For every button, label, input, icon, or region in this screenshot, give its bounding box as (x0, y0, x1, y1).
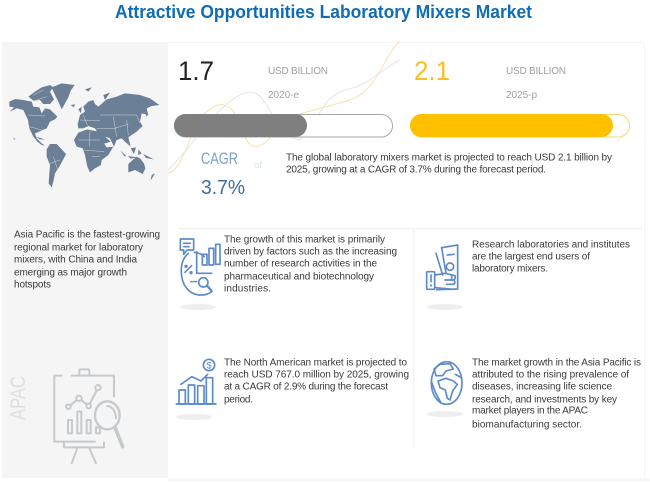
left panel text: mixers, with China and India (14, 254, 137, 266)
growth drivers text: number of research activities in the (224, 258, 377, 270)
panel: Asia Pacific drivers (427, 358, 641, 430)
Asia Pacific drivers text: research, and investments by key (472, 394, 617, 406)
North America text: reach USD 767.0 million by 2025, growing (224, 370, 409, 380)
decorative trend curves (168, 42, 400, 173)
stat: 2020 value: USD BILLION (268, 66, 328, 77)
growth drivers text: pharmaceutical and biotechnology (224, 272, 374, 282)
CAGR callout: 3.7% (201, 177, 245, 199)
APAC vertical label: APAC (7, 376, 30, 420)
North America text: at a CAGR of 2.9% during the forecast (224, 382, 388, 392)
CAGR callout: CAGR (201, 150, 238, 168)
icon shadow (176, 414, 212, 420)
icon: presentation board with magnifier (54, 369, 123, 463)
end users text: laboratory mixers. (472, 264, 548, 274)
end users text: Research laboratories and institutes (472, 240, 630, 250)
stat: 2025 value (414, 56, 566, 101)
North America text: The North American market is projected to (224, 358, 407, 368)
Asia Pacific drivers text (472, 358, 641, 430)
left panel text: regional market for laboratory (14, 242, 143, 254)
icon: hand holding cash (427, 245, 458, 290)
bar: 2020 (174, 114, 392, 137)
stat: 2025 value: USD BILLION (506, 66, 566, 77)
stat: 2020 value: 2020-e (268, 90, 299, 101)
panel: growth drivers (180, 234, 397, 310)
panel: left regional sidebar (2, 42, 168, 478)
left panel text: emerging as major growth (14, 268, 127, 278)
stat: 2025 value: 2025-p (506, 90, 537, 101)
Asia Pacific drivers text: attributed to the rising prevalence of (472, 370, 629, 380)
panel: end users (427, 240, 630, 310)
icon shadow (427, 304, 463, 310)
growth drivers text: driven by factors such as the increasing (224, 246, 397, 258)
global market summary text: The global laboratory mixers market is projected to reach USD 2.1 billion by (286, 152, 612, 164)
icon shadow (427, 411, 463, 417)
Asia Pacific drivers text: The market growth in the Asia Pacific is (472, 358, 641, 368)
icon: research chart head (180, 239, 220, 295)
Asia Pacific drivers text: biomanufacturing sector. (472, 420, 582, 430)
Asia Pacific drivers text: diseases, increasing life science (472, 382, 612, 392)
North America text (224, 358, 409, 406)
growth drivers text: industries. (224, 284, 271, 294)
CAGR callout: of (254, 160, 262, 171)
end users text (472, 240, 630, 274)
North America text: period. (224, 394, 253, 406)
end users text: are the largest end users of (472, 252, 590, 262)
CAGR callout (201, 150, 262, 199)
stat: 2020 value: 1.7 (178, 56, 214, 86)
growth drivers text: The growth of this market is primarily (224, 234, 385, 246)
stat: 2020 value (178, 56, 328, 101)
icon shadow (180, 304, 216, 310)
bar: 2025 (410, 114, 630, 137)
global market summary text (286, 152, 612, 176)
left panel text: hotspots (14, 280, 51, 290)
panel: North America (176, 358, 409, 420)
icon: rising bar chart with dollar: $ (207, 360, 212, 370)
growth drivers text (224, 234, 397, 294)
global market summary text: 2025, growing at a CAGR of 3.7% during the forecast period. (286, 164, 546, 176)
left panel text (14, 230, 160, 290)
icon: globe (431, 362, 462, 404)
world map (9, 83, 159, 187)
left panel text: Asia Pacific is the fastest-growing (14, 230, 160, 240)
stat: 2025 value: 2.1 (414, 56, 450, 86)
icon: rising bar chart with dollar (176, 359, 216, 404)
Asia Pacific drivers text: market players in the APAC (472, 406, 588, 416)
title: Attractive Opportunities Laboratory Mixers Market (115, 2, 532, 22)
